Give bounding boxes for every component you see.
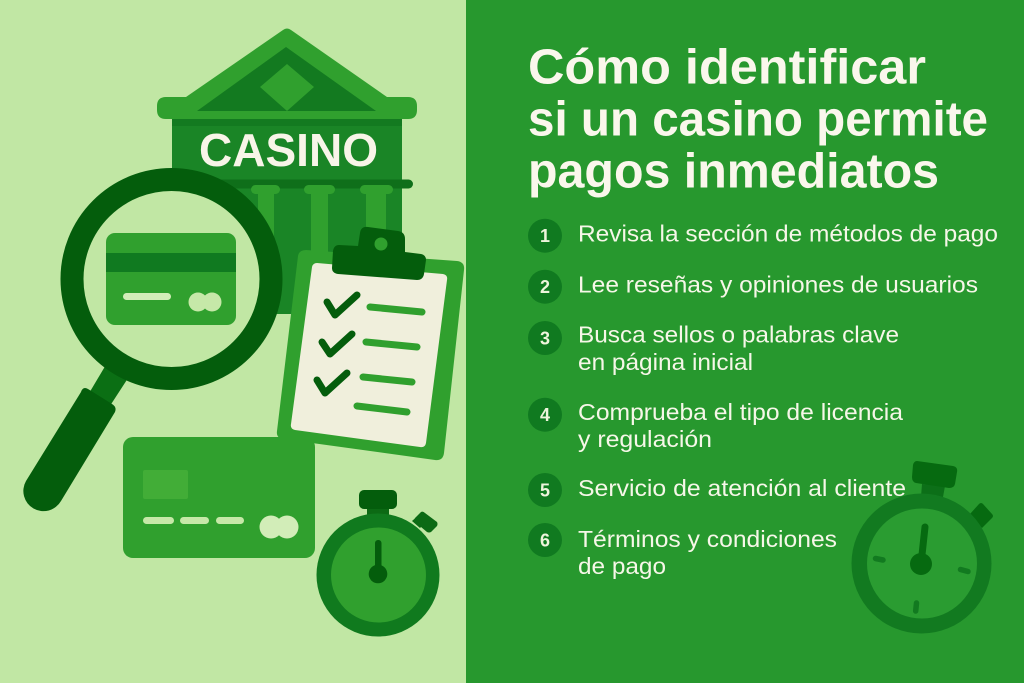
- list item 3: Busca sellos o palabras clave: [578, 322, 899, 348]
- icon: casino building: [157, 28, 417, 314]
- list item 1: [528, 219, 998, 253]
- list item 3: en página inicial: [578, 349, 753, 375]
- icon: stopwatch left: [316, 490, 440, 636]
- list item 4: 4: [540, 405, 550, 425]
- list item 3: [528, 321, 899, 375]
- list item 6: [528, 523, 837, 579]
- icon: credit card in lens: [106, 233, 236, 325]
- list item 4: [528, 398, 903, 452]
- list item 2: 2: [540, 277, 550, 297]
- list item 6: de pago: [578, 553, 666, 579]
- list item 5: [528, 473, 906, 507]
- list item 4: Comprueba el tipo de licencia: [578, 399, 903, 425]
- list item 2: Lee reseñas y opiniones de usuarios: [578, 272, 978, 298]
- list item 6: Términos y condiciones: [578, 526, 837, 552]
- title: pagos inmediatos: [528, 144, 939, 198]
- panel: right background: [466, 0, 1024, 683]
- list item 5: 5: [540, 480, 550, 500]
- icon: stopwatch right background: [852, 461, 993, 634]
- icon: magnifying glass: [23, 180, 271, 511]
- list item 4: y regulación: [578, 426, 712, 452]
- panel: left background: [0, 0, 466, 683]
- title: si un casino permite: [528, 92, 988, 146]
- list item 3: 3: [540, 328, 550, 348]
- list item 2: [528, 270, 978, 304]
- icon: clipboard checklist: [277, 227, 464, 460]
- list item 1: 1: [540, 226, 550, 246]
- list item 5: Servicio de atención al cliente: [578, 475, 906, 501]
- list item 1: Revisa la sección de métodos de pago: [578, 221, 998, 247]
- list item 6: 6: [540, 530, 550, 550]
- icon: credit card bottom: [123, 437, 315, 558]
- title: [528, 40, 988, 198]
- icon: casino building: CASINO: [199, 124, 378, 176]
- title: Cómo identificar: [528, 40, 926, 94]
